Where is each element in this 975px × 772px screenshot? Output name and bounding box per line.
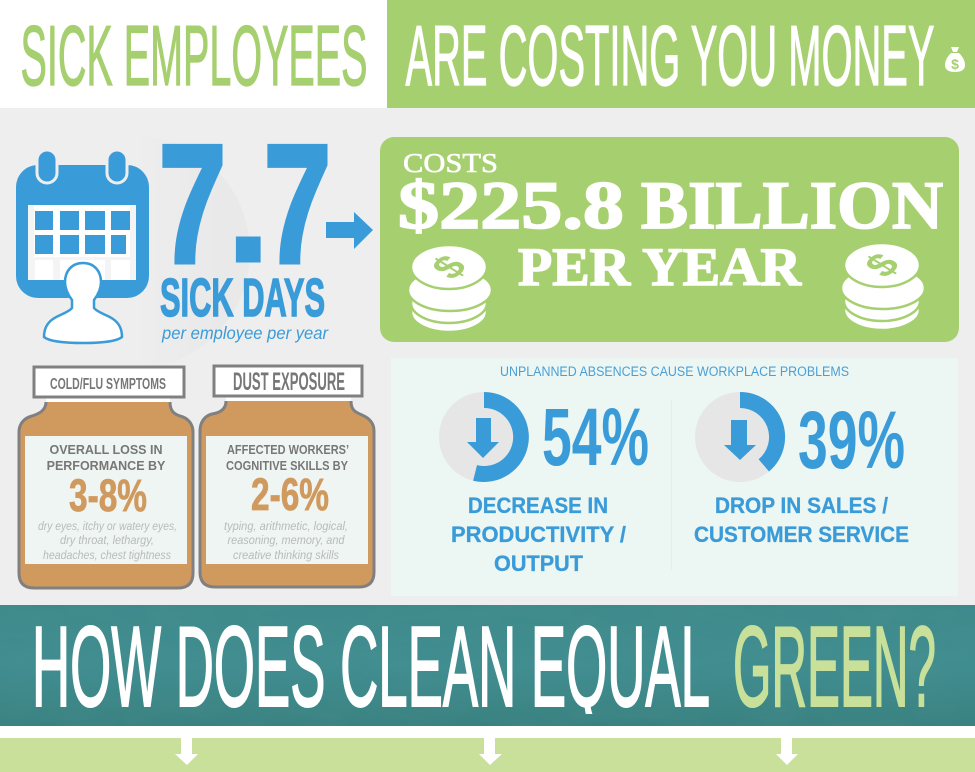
jar text: affected workers: AFFECTED WORKERS’ xyxy=(227,443,349,457)
jar text: symptoms list: headaches, chest tightness xyxy=(43,548,171,562)
jar label: dust exposure xyxy=(214,366,362,396)
arrow: down 2 xyxy=(479,738,502,765)
icon: coin stack right xyxy=(841,243,925,330)
panel: costs xyxy=(380,137,959,342)
icon: money bag: $ xyxy=(951,56,959,72)
icon: coin stack right: $ xyxy=(856,246,909,284)
text: costs: COSTS xyxy=(403,148,498,178)
jar text: affected workers: COGNITIVE SKILLS BY xyxy=(226,459,349,473)
text: per year: PER YEAR xyxy=(518,237,802,297)
icon: calendar with person xyxy=(16,150,149,343)
label: sick days: SICK DAYS xyxy=(160,268,325,328)
stat: 7.7 sick days xyxy=(159,110,331,343)
header: sick employees xyxy=(0,0,387,108)
stat: 7.7 sick days: 7 xyxy=(264,110,331,298)
footer bar with arrows xyxy=(0,738,975,772)
donut chart: 39% xyxy=(695,392,785,482)
label: decrease in productivity xyxy=(451,493,626,576)
jar text: overall loss xyxy=(47,443,166,473)
jar label: cold flu symptoms: COLD/FLU SYMPTOMS xyxy=(50,376,166,393)
donut chart: 54% xyxy=(439,392,529,482)
stat: 7.7 sick days: . xyxy=(225,110,272,298)
panel heading: UNPLANNED ABSENCES CAUSE WORKPLACE PROBLEMS xyxy=(500,364,849,379)
icon: coin stack left xyxy=(408,245,492,332)
jar label: dust exposure: DUST EXPOSURE xyxy=(233,368,345,396)
jar stat: 2-6%: 2-6% xyxy=(251,469,329,520)
infographic canvas: SICK EMPLOYEES xyxy=(20,9,368,104)
jar text: overall loss: OVERALL LOSS IN xyxy=(50,443,162,457)
label: per employee per year: per employee per year xyxy=(161,323,329,343)
arrow: down 3 xyxy=(776,738,798,765)
label: drop in sales: CUSTOMER SERVICE xyxy=(694,522,909,547)
jar text: skills list xyxy=(224,519,348,562)
icon: money bag xyxy=(945,47,965,72)
jar text: symptoms list xyxy=(38,519,177,562)
panel: workplace problems xyxy=(391,358,958,596)
jar text: symptoms list: dry throat, lethargy, xyxy=(60,533,154,547)
jar text: overall loss: PERFORMANCE BY xyxy=(47,459,166,473)
icon: coin stack left: $ xyxy=(423,248,476,286)
jar text: skills list: creative thinking skills xyxy=(233,548,339,562)
label: decrease in productivity: PRODUCTIVITY / xyxy=(451,522,626,547)
label: drop in sales xyxy=(694,493,909,547)
stat: 7.7 sick days: 7 xyxy=(159,110,226,298)
label: decrease in productivity: DECREASE IN xyxy=(468,493,608,518)
text: amount: BILLION xyxy=(641,167,943,243)
jar text: skills list: reasoning, memory, and xyxy=(228,533,345,547)
jar text: symptoms list: dry eyes, itchy or watery eyes, xyxy=(38,519,177,533)
stat: 39%: 39% xyxy=(798,395,905,486)
stat: 54%: 54% xyxy=(542,392,649,483)
panel: cold flu jar xyxy=(19,367,193,588)
label: drop in sales: DROP IN SALES / xyxy=(715,493,888,518)
text: amount xyxy=(398,167,943,243)
jar text: skills list: typing, arithmetic, logical, xyxy=(224,519,348,533)
arrow: to costs xyxy=(326,212,373,249)
label: decrease in productivity: OUTPUT xyxy=(494,551,584,576)
arrow: down 1 xyxy=(175,738,198,765)
panel: dust exposure jar xyxy=(200,366,374,587)
jar text: affected workers xyxy=(226,443,349,473)
jar stat: 3-8%: 3-8% xyxy=(69,470,147,521)
text: amount: $225.8 xyxy=(398,167,624,243)
jar label: cold flu symptoms xyxy=(34,367,184,397)
